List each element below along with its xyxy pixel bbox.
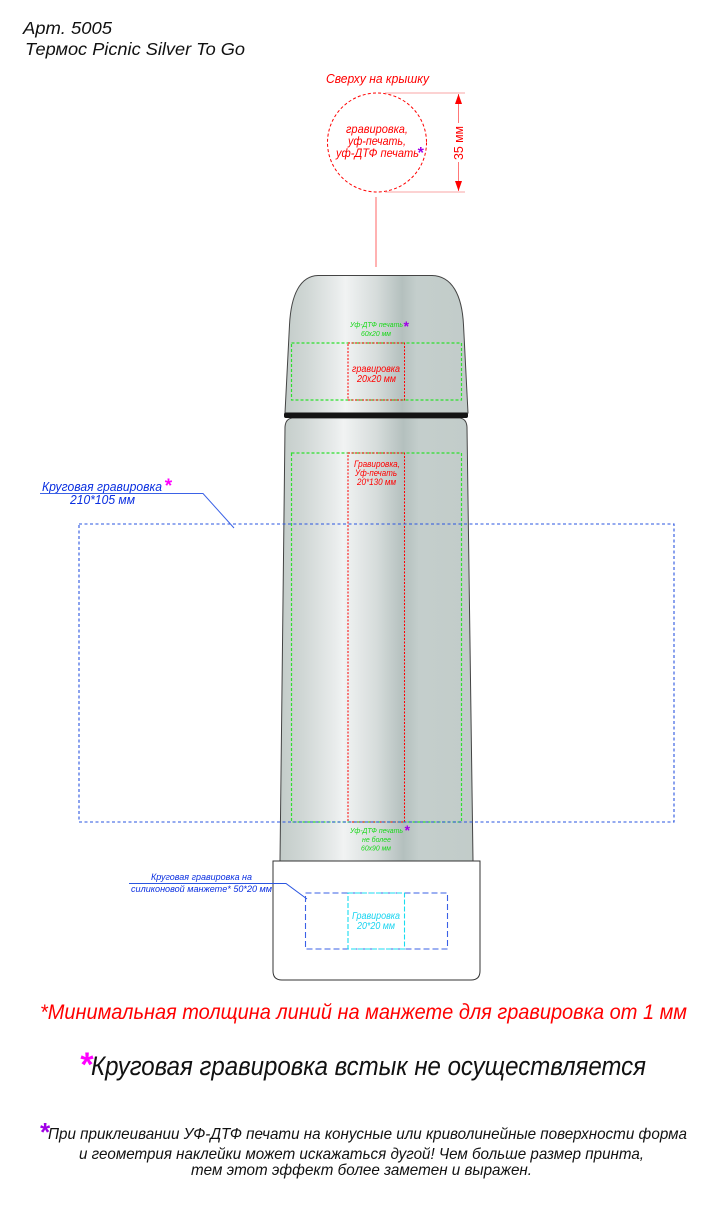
lid methods text: [335, 122, 419, 160]
wrap size: 210*105 мм: [69, 493, 135, 507]
thermos cap: [285, 276, 468, 413]
note: UV-DTF distortion: и геометрия наклейки может искажаться дугой! Чем больше размер принта,: [79, 1146, 644, 1163]
dimension 35 mm: 35 мм: [451, 126, 466, 160]
lid zone heading: Сверху на крышку: [326, 72, 430, 86]
wrap leader line: [40, 494, 234, 528]
blue dashed wrap rectangle: [79, 524, 674, 822]
note: UV-DTF distortion: тем этот эффект более заметен и выражен.: [191, 1162, 532, 1179]
cuff label: Круговая гравировка на: [151, 872, 252, 882]
body UV-DTF label: [349, 826, 403, 852]
body engraving label: 20*130 мм: [356, 477, 396, 488]
purple asterisk: *: [403, 318, 409, 334]
purple asterisk: *: [417, 145, 424, 162]
top lid print zone: [326, 72, 466, 267]
cap red area: [348, 343, 404, 400]
note: circular engraving: Круговая гравировка встык не осуществляется: [91, 1051, 646, 1081]
purple asterisk: *: [404, 822, 410, 838]
thermos: [273, 276, 480, 980]
circular engraving area: [40, 476, 674, 822]
body engraving label: Гравировка,: [354, 459, 400, 470]
cuff cyan area: [348, 893, 404, 949]
lid methods text: уф-печать,: [347, 134, 406, 148]
body print areas: [292, 453, 462, 852]
cuff engraving area: [129, 872, 448, 949]
note: circular engraving: *: [79, 1046, 94, 1084]
lid methods text: гравировка,: [346, 122, 408, 136]
thermos body: [280, 418, 473, 861]
black band: [284, 412, 468, 418]
note: UV-DTF distortion: *: [39, 1117, 51, 1147]
dimension 35 mm: [385, 93, 466, 192]
cap engraving label: 20х20 мм: [356, 374, 396, 385]
cap engraving label: гравировка: [352, 364, 400, 375]
title: Термос Picnic Silver To Go: [25, 39, 245, 59]
pink asterisk: *: [164, 476, 173, 497]
body engraving label: [354, 459, 400, 488]
silicone cuff: [273, 861, 480, 980]
cuff engraving text: Гравировка: [352, 911, 400, 922]
title: [22, 18, 245, 59]
cuff blue area: [306, 893, 448, 949]
body green area: [292, 453, 462, 822]
cap UV-DTF label: [349, 320, 403, 338]
cap engraving label: [352, 364, 400, 385]
wrap label: Круговая гравировка: [42, 480, 162, 494]
body UV-DTF label: 60х90 мм: [361, 844, 391, 852]
cuff engraving text: 20*20 мм: [356, 921, 395, 932]
body UV-DTF label: не более: [362, 835, 391, 844]
body red area: [348, 453, 404, 822]
cap print areas: [292, 318, 462, 400]
leader line to lid: [375, 197, 377, 267]
cap UV-DTF label: 60х20 мм: [361, 329, 391, 338]
lid methods text: уф-ДТФ печать: [335, 146, 419, 160]
note: UV-DTF distortion: При приклеивании УФ-ДТФ печати на конусные или криволинейные поверхности форма: [48, 1126, 687, 1143]
cuff engraving text: [352, 911, 400, 932]
title: Арт. 5005: [22, 18, 112, 38]
cap UV-DTF label: Уф-ДТФ печать: [349, 320, 403, 329]
body UV-DTF label: Уф-ДТФ печать: [349, 826, 403, 835]
cuff label: [131, 872, 272, 894]
note: UV-DTF distortion: [39, 1117, 687, 1179]
note: minimum line thickness: *Минимальная толщина линий на манжете для гравировка от 1 мм: [40, 1001, 687, 1024]
cap green area: [292, 343, 462, 400]
cuff leader line: [129, 884, 307, 899]
lid dashed circle: [328, 93, 426, 192]
body engraving label: Уф-печать: [354, 468, 397, 479]
cuff label: силиконовой манжете* 50*20 мм: [131, 884, 272, 894]
